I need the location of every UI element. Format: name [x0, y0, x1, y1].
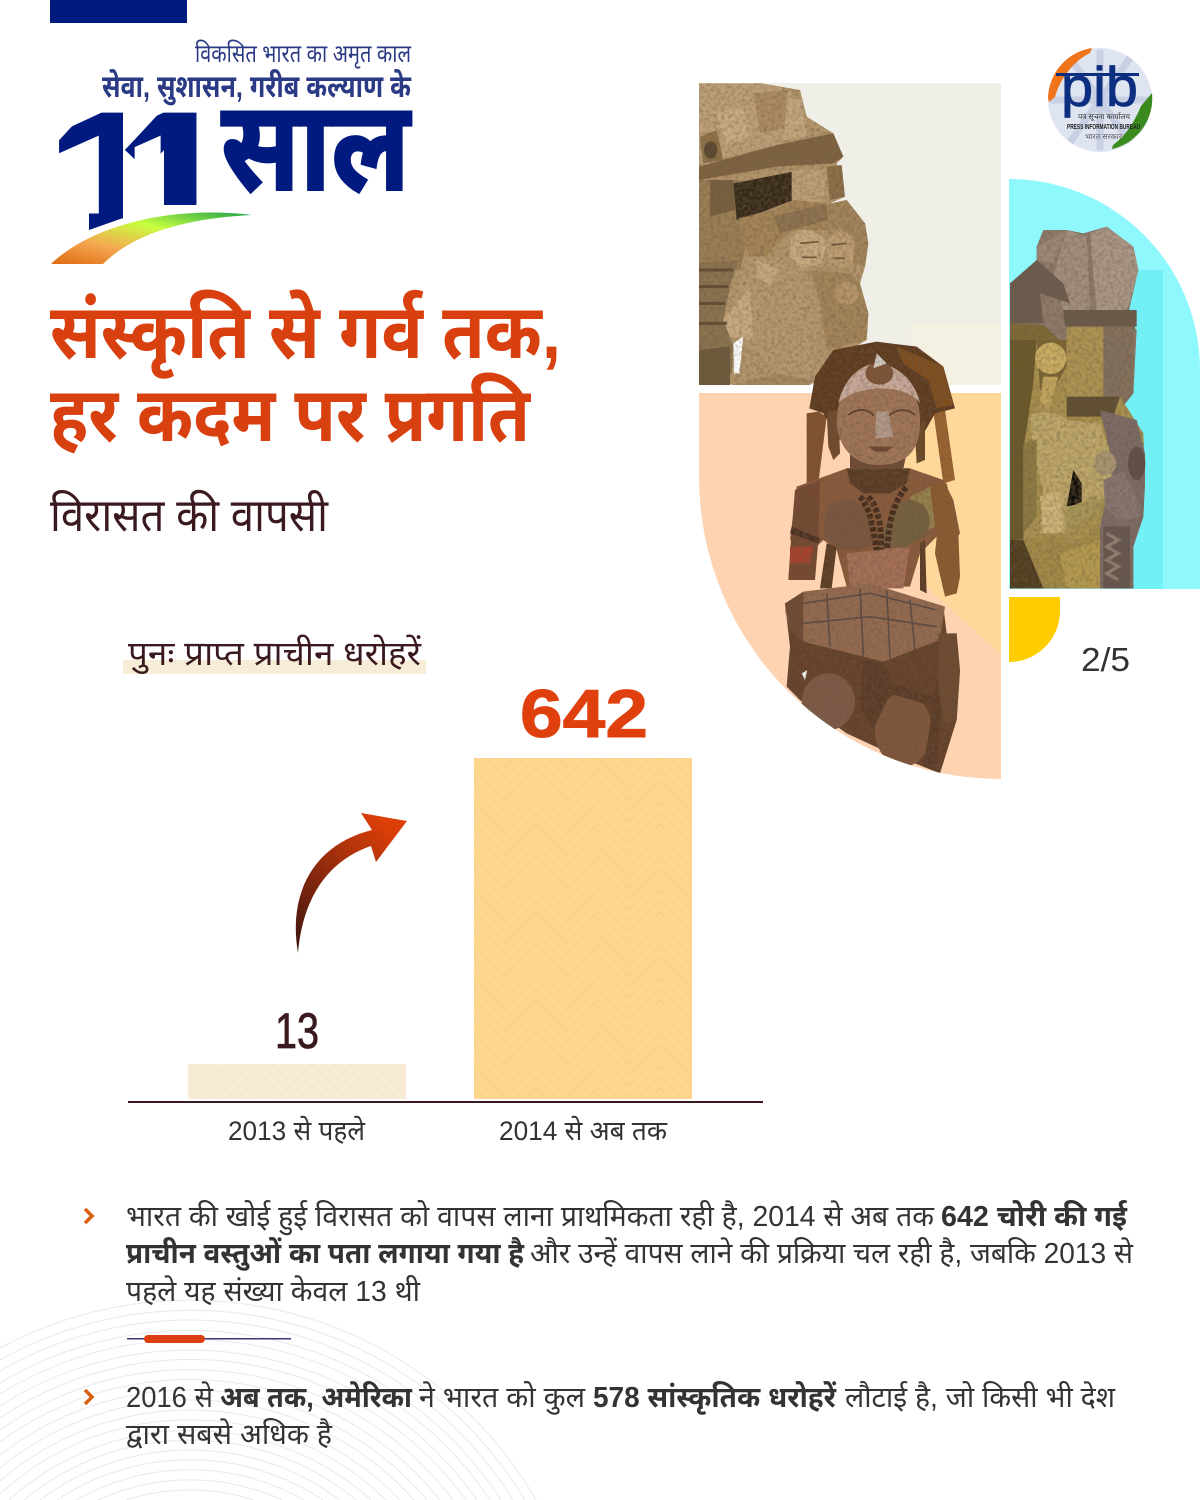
PIB logo: पत्र सूचना कार्यालय [1078, 112, 1131, 122]
chart heading: पुनः प्राप्त प्राचीन धरोहरें [128, 634, 422, 674]
bullet two [85, 1380, 1116, 1451]
decorative yellow quarter shape [1009, 597, 1060, 662]
title [50, 289, 561, 458]
panel: grey sculpture tile [699, 83, 1001, 385]
label 2013: 2013 से पहले [228, 1115, 366, 1146]
title: हर कदम पर प्रगति [50, 373, 532, 458]
label 2014: 2014 से अब तक [499, 1115, 668, 1146]
sculpture: sandstone figure with folded hands [1010, 227, 1145, 588]
bar: 2013 [188, 1064, 406, 1099]
bullet one: 642 चोरी की गई [941, 1200, 1128, 1233]
logo word saal: साल [221, 76, 412, 217]
sculpture: wooden female figure with drum [785, 342, 960, 773]
subtitle: विरासत की वापसी [50, 489, 329, 541]
bar chart [128, 676, 763, 1146]
logo numeral 11: 11 [44, 77, 234, 269]
PIB logo: pib [1061, 55, 1138, 118]
sculpture: carved temple couple [699, 83, 868, 385]
page counter: 2/5 [1081, 641, 1130, 678]
logo tagline: विकसित भारत का अमृत काल [195, 39, 412, 69]
axis [128, 1101, 763, 1103]
value 642: 642 [520, 676, 648, 752]
bullet two: ने भारत को कुल [419, 1381, 586, 1415]
logo: 11 years campaign mark [44, 39, 412, 269]
bullet one: और उन्हें वापस लाने की प्रक्रिया चल रही है, जबकि 2013 से [530, 1237, 1134, 1270]
logo subheading: सेवा, सुशासन, गरीब कल्याण के [102, 69, 412, 106]
arrow: upward growth [296, 813, 407, 953]
bullet two: 578 सांस्कृतिक धरोहरें [593, 1381, 837, 1415]
bullet one: प्राचीन वस्तुओं का पता लगाया गया है [126, 1237, 525, 1271]
bullet two: अब तक, अमेरिका [220, 1380, 412, 1414]
value 13: 13 [275, 1003, 319, 1059]
divider [127, 1335, 291, 1343]
bullet one [85, 1200, 1134, 1308]
bullet two: लौटाई है, जो किसी भी देश [845, 1381, 1116, 1414]
bullet two: द्वारा सबसे अधिक है [126, 1418, 333, 1451]
bullet marker [85, 1390, 92, 1404]
PIB logo: भारत सरकार [1085, 132, 1123, 141]
panel: peach quarter-circle tile [699, 342, 1001, 779]
title: संस्कृति से गर्व तक, [50, 289, 561, 379]
background concentric line pattern [0, 1300, 536, 1500]
bullet marker [85, 1209, 92, 1223]
top navy tab [50, 0, 187, 23]
panel: cyan arch tile [1009, 179, 1200, 589]
PIB logo: PRESS INFORMATION BUREAU [1067, 122, 1140, 131]
bullet one: भारत की खोई हुई विरासत को वापस लाना प्राथमिकता रही है, 2014 से अब तक [126, 1200, 935, 1236]
PIB logo [1048, 48, 1152, 152]
bar: 2014 [474, 758, 692, 1099]
bullet two: 2016 से [126, 1381, 214, 1414]
logo swoosh [51, 213, 252, 264]
bullet one: पहले यह संख्या केवल 13 थी [126, 1275, 420, 1308]
